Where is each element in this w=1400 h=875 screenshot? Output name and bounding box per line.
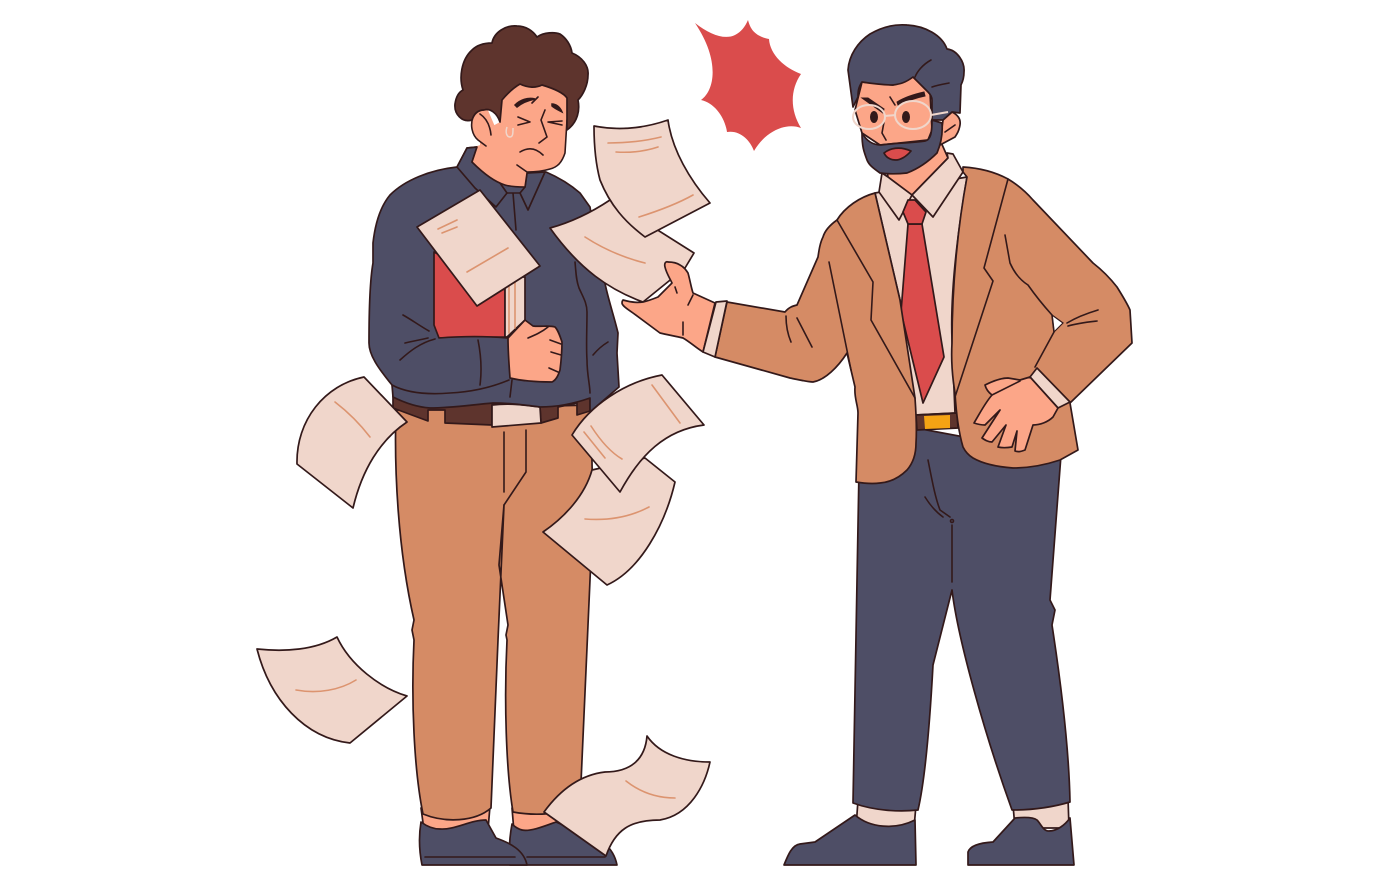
boss left hand and cuff [622,262,727,357]
employee ankles [421,805,580,832]
employee ear outline [472,114,491,146]
employee sweater [369,147,619,412]
employee face [480,85,570,172]
employee figure [369,26,619,865]
boss mouth [884,148,911,160]
boss eyes and brows [862,92,925,140]
employee fist [508,320,562,382]
falling paper: lower right [543,458,675,585]
employee head [455,26,588,172]
boss belt [916,413,958,430]
employee ear and jaw fill [471,108,505,150]
falling paper: left [297,377,407,508]
boss ear [940,112,960,145]
falling paper: on floor [544,736,710,856]
held paper [550,200,694,302]
employee hair [455,26,588,130]
red folder and pages [434,252,525,338]
jacket right panel and sleeve [952,167,1132,468]
boss neck [885,140,948,195]
boss hand on hip [974,377,1058,452]
employee shoes [419,820,617,865]
employee facial features [506,97,562,155]
anger burst [695,20,801,151]
boss hair [848,25,964,120]
boss glasses [853,101,948,129]
boss tie [901,200,944,403]
jacket left panel and sleeve [715,193,916,483]
employee belt [393,393,590,427]
boss face [855,77,932,145]
employee trousers [396,405,592,820]
falling paper: lower left [257,637,407,743]
employee face outline [517,120,567,172]
boss shoes [784,815,1074,865]
employee forearm [392,315,512,397]
paper on chest [417,190,540,306]
angry boss figure [715,25,1132,865]
boss right cuff [1030,368,1070,408]
flying paper: top [594,120,710,237]
boss collar [879,153,963,220]
boss beard [862,120,942,174]
employee neck [472,130,560,187]
boss trousers [853,428,1070,811]
boss socks [856,798,1069,828]
boss jacket [715,167,1132,483]
boss shirt [875,177,967,415]
employee neck line [472,147,527,187]
falling paper: upper right [572,375,704,492]
boss head [848,25,964,174]
